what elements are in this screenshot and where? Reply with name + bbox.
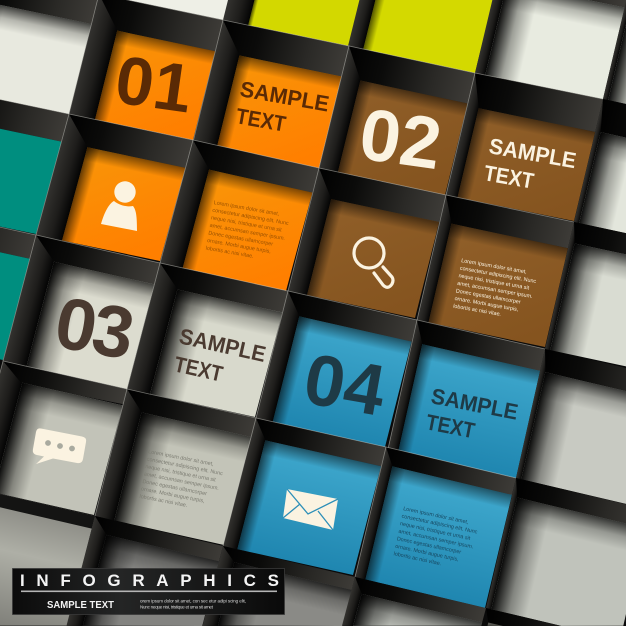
heading: sample text blue: TEXT [424, 409, 477, 443]
panel: top lime cell right [348, 0, 505, 73]
icon: magnifier [354, 238, 393, 287]
heading: sample text blue: SAMPLE [429, 383, 520, 425]
text block: brown lorem: neque nisi, tristique et urna sit [458, 273, 530, 292]
panel: brown lorem text [411, 195, 586, 376]
text block: orange lorem: consectetur adipiscing elit. Nunc [212, 208, 289, 227]
text block: blue lorem: Donec egestas ullamcorper [396, 536, 462, 556]
panel: teal cell lower [0, 208, 36, 360]
panel: bottom dark grey cell [66, 516, 223, 626]
text block: banner caption: orem ipsum dolor sit amet, con sec etur adipi scing elit, [140, 598, 246, 604]
heading: sample text grey: SAMPLE [177, 323, 268, 367]
panel: 04 number [251, 291, 434, 472]
icon: envelope [283, 489, 338, 530]
text block: grey lorem: Lorem ipsum dolor sit amet, [148, 449, 215, 468]
text block: blue lorem: lobortis ac nisi vitae. [393, 551, 442, 567]
panel: teal cell upper [0, 88, 69, 234]
title: infographics: INFOGRAPHICS [20, 571, 279, 590]
text block: brown lorem: amet, accumsan semper ipsum. [457, 281, 533, 300]
panel: top lime cell left [223, 0, 379, 46]
text block: grey lorem: ornare. Morbi augue turpis, [140, 486, 206, 505]
text block: brown lorem [453, 258, 538, 323]
heading: sample text grey: TEXT [172, 351, 226, 387]
text block: orange lorem: lobortis ac nisi vitae. [205, 246, 254, 260]
panel: mail icon cell [218, 418, 400, 597]
panel: top right white cell [468, 0, 626, 132]
panel: brown sample text [438, 73, 615, 256]
text block: brown lorem: consectetur adipiscing elit. Nunc [459, 266, 537, 285]
panel: right white cell row 3 [511, 349, 626, 532]
panel: blue lorem text [351, 447, 526, 626]
number 04: 04 [298, 339, 391, 432]
panel: right white cell row 4 [486, 478, 626, 626]
number 03: 03 [49, 282, 140, 375]
panel: right white cell row 1 [566, 99, 626, 283]
text block: blue lorem: Lorem ipsum dolor sit amet, [403, 506, 469, 526]
panel: left white cell [0, 0, 104, 145]
text block: blue lorem: ornare. Morbi augue turpis, [395, 544, 460, 563]
panel: person icon cell [28, 114, 219, 294]
panel: far right top white cell [596, 0, 626, 159]
panel: bottom mid grey cell [203, 546, 355, 626]
number 02: 02 [355, 94, 446, 185]
text block: blue lorem: amet, accumsan semper ipsum. [398, 529, 474, 550]
number 01: 01 [111, 42, 197, 127]
text block: orange lorem: Donec egestas ullamcorper [208, 230, 274, 248]
text block: orange lorem: amet, accumsan semper ipsum. [209, 223, 285, 242]
heading: sample text brown [482, 133, 578, 194]
subtitle: sample text: SAMPLE TEXT [47, 599, 115, 611]
text block: brown lorem: ornare. Morbi augue turpis, [454, 296, 519, 313]
text block: grey lorem: consectetur adipiscing elit. Nunc [146, 457, 223, 477]
panel: magnifier icon cell [281, 168, 465, 349]
panel: grey lorem text [90, 389, 275, 568]
text block: banner caption [140, 598, 246, 610]
panel: grey sample text [121, 263, 311, 443]
text block: grey lorem: amet, accumsan semper ipsum. [143, 471, 219, 492]
panel: 03 number [0, 235, 184, 416]
heading: sample text orange: SAMPLE [238, 76, 331, 117]
text block: blue lorem: consectetur adipiscing elit. Nunc [401, 514, 478, 536]
text block: grey lorem [139, 449, 225, 515]
heading: sample text orange: TEXT [234, 103, 288, 137]
panel: bottom light grey cell [342, 577, 486, 626]
panel: right white cell row 2 [540, 222, 626, 398]
text block: banner caption: Nunc neque nisi, tristique et urna sit amet [140, 604, 214, 610]
text block: grey lorem: Donec egestas ullamcorper [142, 479, 208, 497]
text block: orange lorem: ornare. Morbi augue turpis, [206, 238, 272, 255]
text block: orange lorem: neque nisi, tristique et urna sit [210, 215, 283, 234]
panel: orange sample text [186, 20, 373, 203]
icon: chat bubble [33, 428, 86, 464]
title banner [12, 568, 284, 614]
text block: orange lorem: Lorem ipsum dolor sit amet, [213, 200, 280, 218]
panel: blue sample text [383, 320, 555, 502]
text block: brown lorem: Lorem ipsum dolor sit amet, [461, 258, 528, 276]
heading: sample text brown: SAMPLE [487, 133, 578, 173]
panel: bottom left grey cell [0, 487, 95, 626]
text block: grey lorem: neque nisi, tristique et urna sit [145, 464, 217, 484]
panel: top white cell [99, 0, 253, 20]
text block: brown lorem: Donec egestas ullamcorper [455, 288, 521, 306]
panel: bottom right cell [482, 608, 561, 626]
text block: orange lorem [205, 200, 291, 265]
text block: brown lorem: lobortis ac nisi vitae. [453, 304, 501, 318]
icon: person [101, 181, 137, 231]
text block: grey lorem: lobortis ac nisi vitae. [139, 494, 188, 509]
panel: chat icon cell [0, 361, 151, 537]
heading: sample text grey [172, 323, 268, 387]
heading: sample text blue [424, 383, 520, 443]
heading: sample text orange [234, 76, 331, 137]
panel: 01 number [61, 0, 249, 177]
heading: sample text brown: TEXT [482, 160, 536, 194]
text block: blue lorem: neque nisi, tristique et urna sit [399, 521, 471, 542]
text block: blue lorem [393, 506, 480, 573]
panel: orange lorem text [153, 140, 342, 321]
panel: 02 number [312, 46, 494, 230]
